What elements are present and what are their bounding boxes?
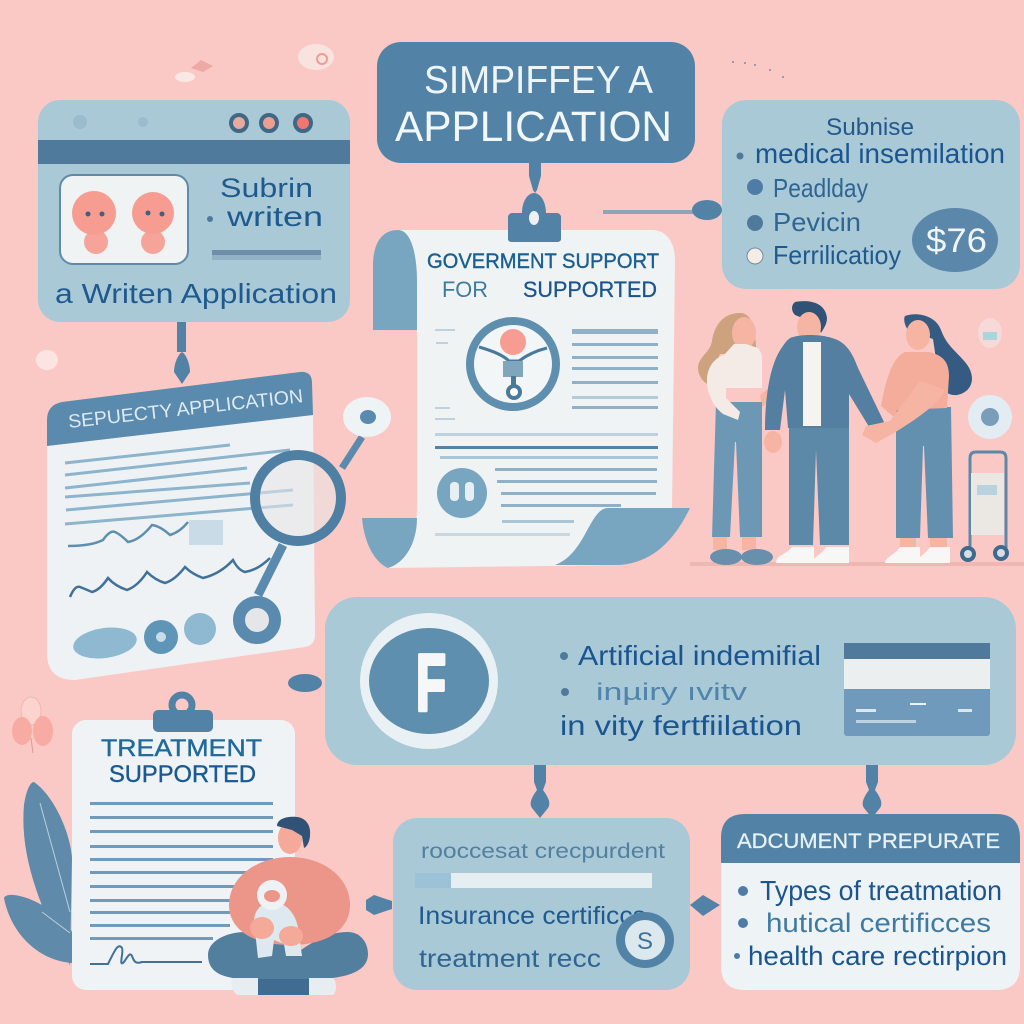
ground shadow (690, 562, 1024, 566)
panel: medical insemination: Pevicin (773, 207, 861, 237)
icon: emblem circle (470, 321, 556, 407)
title (377, 42, 695, 163)
icon: F circle (360, 613, 498, 749)
panel: treatment supported clipboard (72, 695, 295, 990)
panel: central scroll document (362, 193, 690, 568)
panel: treatments with F icon (325, 597, 1016, 765)
panel: document preparation: hutical certificces (766, 908, 991, 938)
panel: treatments with F icon: in vity fertfiilation (560, 710, 802, 741)
connector: browser panel to form (174, 320, 190, 384)
panel: submit written application: Subrin (220, 173, 313, 203)
person: centre man (764, 301, 884, 563)
panel: submit written application (38, 100, 350, 322)
icon: pink flower (12, 697, 53, 753)
icon: chain of dots (71, 613, 216, 662)
person: left woman (698, 313, 788, 565)
scroll curl: bottom left (362, 518, 417, 568)
title: SIMPIFFEY A (424, 59, 653, 102)
scroll text lines (435, 329, 658, 536)
icon: balloon (978, 318, 1002, 348)
icon: round disc (968, 395, 1012, 439)
person: seated parent holding baby (208, 817, 368, 995)
scroll curl: bottom right (555, 508, 690, 565)
panel: application form with magnifier (47, 372, 391, 680)
icon: rolling suitcase (962, 452, 1007, 560)
panel: treatments with F icon: Artificial indemifial (578, 640, 821, 671)
panel: treatment supported clipboard: TREATMENT (101, 735, 262, 762)
icon: coin (616, 912, 674, 968)
panel: document preparation: health care rectirpion (748, 941, 1007, 971)
panel: application form with magnifier: SEPUECTY APPLICATION (67, 386, 304, 433)
icon: card (844, 643, 990, 736)
chart: first wave (68, 522, 188, 546)
panel: medical insemination: medical insemilation (755, 138, 1005, 169)
panel: central scroll document: SUPPORTED (523, 277, 657, 302)
icon: small round stamp (437, 468, 487, 518)
panel: medical insemination (722, 100, 1020, 289)
panel: medical insemination: Subnise (826, 114, 914, 141)
panel: insurance certificate: treatment recc (419, 945, 601, 973)
panel: central scroll document: GOVERMENT SUPPORT (427, 250, 659, 273)
panel: medical insemination: Ferrilicatioy (773, 240, 901, 270)
panel: treatments with F icon: inµiry ıvitv (596, 679, 747, 706)
panel: submit written application: writen (226, 201, 323, 232)
panel: submit written application: a Writen Application (55, 278, 337, 309)
connector: scroll to medical panel (603, 200, 722, 220)
panel: central scroll document: FOR (442, 277, 488, 302)
icon: coin: S (637, 928, 653, 955)
panel: insurance certificate: Insurance certificcs (418, 902, 646, 930)
panel: treatment supported clipboard: SUPPORTED (109, 761, 256, 788)
title: APPLICATION (395, 103, 672, 151)
icon: plant leaves (4, 782, 72, 965)
badge: price: $76 (926, 222, 987, 260)
connector: title to scroll (529, 162, 541, 193)
connector: treatment panel to document panel (863, 764, 881, 818)
panel: document preparation: Types of treatmation (760, 875, 1002, 906)
icon: two baby faces card (60, 175, 188, 264)
form lines (65, 445, 293, 524)
clipboard lines (90, 802, 273, 940)
icon: window buttons (231, 115, 311, 131)
scroll curl: top left (373, 230, 417, 330)
panel: medical insemination: Peadlday (773, 173, 868, 203)
baby (254, 880, 302, 958)
icon: F circle: F (416, 638, 446, 727)
connector: clipboard to insurance panel (366, 895, 392, 915)
panel: insurance certificate: rooccesat crecpurdent (421, 840, 665, 863)
person: right woman (862, 314, 972, 563)
connector: insurance panel to document panel (690, 895, 720, 916)
icon: magnifying glass (239, 397, 391, 638)
people: three adults (690, 301, 1024, 566)
connector: treatment panel to insurance panel (531, 764, 549, 818)
connector: form to treatment panel (288, 674, 322, 692)
panel: insurance certificate (393, 818, 690, 990)
chart: second wave (70, 558, 270, 597)
icon: clip on scroll (508, 193, 561, 242)
panel: document preparation (721, 814, 1020, 990)
panel: document preparation: ADCUMENT PREPURATE (737, 830, 1000, 853)
signature (90, 946, 202, 964)
decorative doodles (36, 44, 784, 370)
badge: price (912, 208, 998, 272)
